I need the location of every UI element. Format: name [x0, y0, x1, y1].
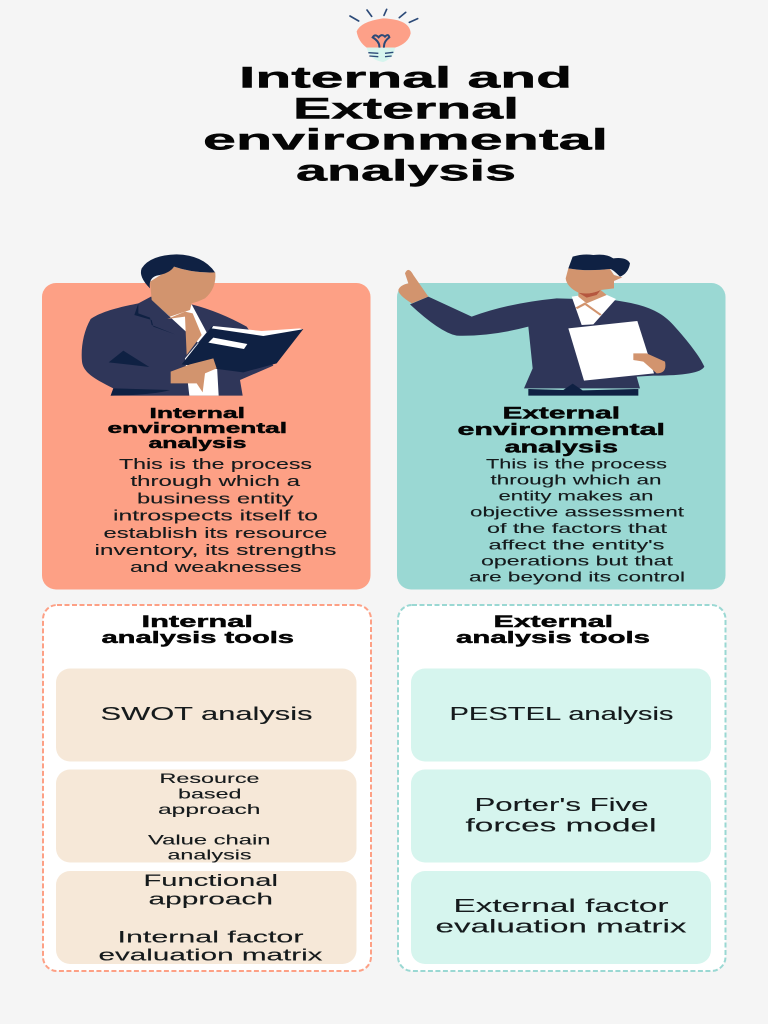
card: external factor evaluation matrix: evaluation matrix [436, 916, 686, 936]
card: SWOT analysis: SWOT analysis [100, 704, 312, 724]
card: functional approach and internal factor evaluation matrix: Internal factor [118, 928, 304, 946]
heading: internal environmental analysis: Internal [150, 405, 245, 422]
card: external factor evaluation matrix: External factor [454, 896, 668, 916]
text: internal description: This is the process [119, 457, 312, 473]
heading: internal analysis tools: Internal [142, 612, 253, 631]
text: internal description: inventory, its strengths [94, 543, 336, 559]
card: resource based approach and value chain analysis: based [178, 786, 242, 802]
text: external description: through which an [490, 472, 662, 488]
text: external description: entity makes an [498, 488, 654, 504]
card: resource based approach and value chain analysis [56, 770, 356, 862]
card: functional approach and internal factor evaluation matrix: evaluation matrix [98, 946, 323, 964]
card: functional approach and internal factor evaluation matrix: approach [148, 890, 273, 908]
heading: external analysis tools: External [494, 612, 613, 631]
text: internal description: introspects itself to [113, 508, 318, 524]
card: resource based approach and value chain analysis: Resource [160, 770, 260, 786]
title: analysis [296, 154, 516, 188]
text: external description: This is the process [486, 456, 667, 472]
icon: light bulb [350, 9, 418, 62]
title [203, 62, 608, 188]
text: internal description: establish its resource [104, 526, 328, 542]
text: internal description: business entity [137, 492, 295, 508]
heading: internal environmental analysis [108, 405, 287, 452]
text: external description: of the factors that [487, 520, 667, 536]
text: external description: objective assessment [470, 504, 684, 520]
card: functional approach and internal factor evaluation matrix: Functional [144, 871, 278, 890]
text: internal description: and weaknesses [130, 560, 302, 576]
card: resource based approach and value chain analysis: approach [158, 801, 260, 817]
card: Porter's Five forces model: Porter's Five [474, 795, 648, 815]
heading: external analysis tools: analysis tools [456, 628, 650, 647]
card: functional approach and internal factor evaluation matrix [56, 871, 356, 964]
heading: internal analysis tools: analysis tools [102, 628, 294, 647]
heading: external environmental analysis: analysis [504, 438, 618, 456]
card: resource based approach and value chain analysis: Value chain [148, 832, 270, 848]
panel: internal environmental analysis [42, 254, 370, 589]
title: External [293, 92, 519, 126]
card: resource based approach and value chain analysis: analysis [168, 846, 252, 862]
heading: external environmental analysis [458, 404, 665, 456]
heading: external environmental analysis: environmental [458, 420, 665, 439]
text: external description: affect the entity's [488, 536, 664, 552]
title: Internal and [239, 62, 572, 94]
panel: external analysis tools [398, 605, 726, 971]
text: external description [469, 456, 685, 584]
heading: internal environmental analysis: analysis [148, 435, 246, 452]
title: environmental [203, 124, 608, 156]
card: external factor evaluation matrix [411, 871, 711, 964]
heading: external environmental analysis: External [502, 404, 620, 422]
text: external description: operations but that [481, 552, 673, 568]
card: SWOT analysis [56, 668, 356, 762]
panel: external environmental analysis [397, 254, 726, 590]
illustration: businessman reading a book [82, 254, 303, 396]
text: internal description [94, 457, 336, 576]
card: PESTEL analysis: PESTEL analysis [450, 704, 674, 724]
panel: internal analysis tools [43, 605, 371, 971]
text: internal description: through which a [130, 474, 302, 490]
heading: external analysis tools [456, 612, 650, 647]
card: PESTEL analysis [411, 668, 711, 762]
heading: internal analysis tools [102, 612, 294, 647]
heading: internal environmental analysis: environmental [108, 420, 287, 437]
card: Porter's Five forces model [411, 770, 711, 862]
illustration: businessman pointing and holding paper [398, 254, 704, 396]
card: Porter's Five forces model: forces model [466, 816, 656, 836]
text: external description: are beyond its control [469, 568, 685, 584]
